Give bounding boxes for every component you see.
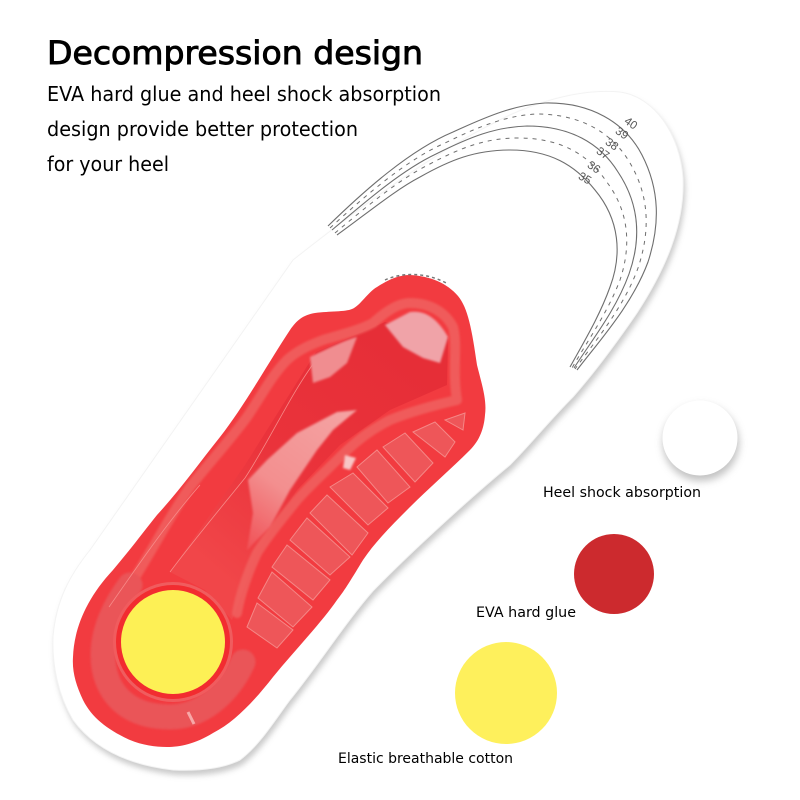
swatch: elastic breathable cotton [455, 642, 557, 744]
gel body [73, 275, 485, 747]
yellow cotton heel pad [121, 590, 225, 694]
arch and heel recess [103, 303, 457, 724]
swatch: heel shock absorption [662, 400, 739, 481]
title: Decompression design [47, 34, 423, 72]
description text: EVA hard glue and heel shock absorption [47, 82, 441, 106]
red EVA arch support [73, 274, 485, 747]
ribbed blocks [247, 413, 465, 648]
description text: for your heel [47, 152, 169, 176]
central recess [170, 322, 448, 620]
label: heel shock absorption: Heel shock absorption [543, 485, 701, 501]
size numbers: 38 [603, 136, 620, 153]
description text: design provide better protection [47, 117, 358, 141]
textured band [103, 303, 457, 717]
swatch: EVA hard glue [574, 534, 654, 614]
toe edge stitching [385, 274, 448, 284]
size guide lines [328, 103, 656, 370]
size numbers: 36 [585, 159, 602, 176]
heel ring [113, 582, 233, 702]
insole: white foam base [53, 91, 685, 775]
size numbers [576, 115, 639, 187]
label: elastic breathable cotton: Elastic breathable cotton [338, 751, 513, 767]
label: EVA hard glue: EVA hard glue [476, 605, 576, 621]
size numbers: 35 [576, 170, 593, 187]
size numbers: 39 [613, 125, 630, 142]
size numbers: 40 [622, 115, 639, 132]
glossy highlights [247, 312, 448, 550]
size numbers: 37 [594, 145, 611, 162]
description text [47, 82, 441, 176]
